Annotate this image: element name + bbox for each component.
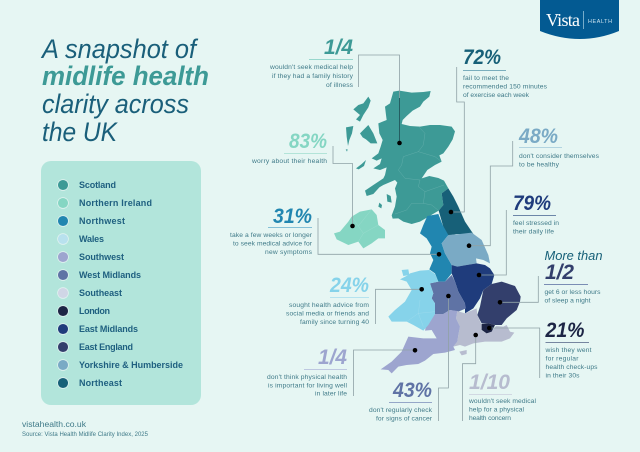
stat: 48% healthy bbox=[467, 125, 600, 248]
stat: 48% healthy: 48% bbox=[518, 125, 558, 148]
panel: legend: Northern Ireland bbox=[79, 198, 152, 208]
stat: 24% advice: sought health advice from bbox=[289, 302, 369, 309]
stat: 1/4 family history: 1/4 bbox=[324, 36, 353, 59]
stat: 24% advice: family since turning 40 bbox=[300, 319, 369, 326]
stat: 1/4 family history: wouldn't seek medical help bbox=[269, 64, 353, 71]
stat: 1/4 physical health bbox=[267, 346, 417, 398]
panel: legend: West Midlands bbox=[79, 270, 141, 280]
region: Northeast bbox=[439, 188, 473, 236]
stat: 1/10 physical concern: wouldn't seek medical bbox=[468, 398, 536, 405]
title: midlife health bbox=[42, 61, 209, 91]
footer: website and source: Source: Vista Health Midlife Clarity Index, 2025 bbox=[22, 432, 149, 438]
stat: more than 1/2 sleep: of sleep a night bbox=[544, 298, 591, 304]
stat: 24% advice bbox=[286, 274, 424, 326]
stat: 72% exercise: recommended 150 minutes bbox=[463, 84, 548, 90]
stat: 48% healthy: to be healthy bbox=[519, 162, 560, 168]
stat: 21% check-ups: for regular bbox=[546, 356, 579, 362]
stat: 72% exercise: of exercise each week bbox=[463, 92, 530, 99]
stat: 72% exercise bbox=[449, 46, 548, 214]
stat: 21% check-ups: 21% bbox=[545, 319, 585, 342]
region: Scotland bbox=[346, 91, 455, 224]
logo: Vista Health: HEALTH bbox=[588, 19, 612, 25]
panel: legend: Scotland bbox=[79, 180, 116, 190]
panel: legend: East Midlands bbox=[79, 324, 138, 334]
stat: 48% healthy: don't consider themselves bbox=[519, 153, 600, 160]
map of the UK bbox=[334, 91, 521, 373]
panel: legend: Southwest bbox=[79, 252, 124, 262]
stat: 21% check-ups: health check-ups bbox=[546, 364, 598, 371]
stat: 21% check-ups bbox=[487, 319, 598, 380]
stat: 43% cancer: 43% bbox=[392, 379, 432, 402]
region: Wales bbox=[388, 269, 438, 331]
panel: legend: Northwest bbox=[79, 216, 125, 226]
stat: 79% stressed: feel stressed in bbox=[513, 220, 559, 227]
stat: 31% delay bbox=[230, 205, 441, 257]
stat: 43% cancer: don't regularly check bbox=[369, 407, 433, 414]
title: A snapshot of bbox=[40, 34, 199, 64]
logo: Vista Health bbox=[540, 0, 619, 39]
stat: 21% check-ups: wish they went bbox=[544, 347, 592, 354]
title: clarity across bbox=[42, 89, 189, 119]
stat: 31% delay: to seek medical advice for bbox=[233, 240, 313, 248]
region: Southeast bbox=[453, 308, 514, 355]
panel: legend: East England bbox=[79, 342, 133, 352]
stat: 79% stressed: their daily life bbox=[513, 228, 554, 236]
stat: 1/4 physical health: in later life bbox=[315, 390, 347, 398]
stat: 31% delay: take a few weeks or longer bbox=[230, 232, 313, 239]
footer: website and source bbox=[22, 419, 149, 438]
England, Wales regions bbox=[381, 214, 521, 373]
stat: 1/4 family history: if they had a family history bbox=[272, 73, 354, 80]
region: East England bbox=[477, 282, 521, 325]
title: the UK bbox=[42, 117, 118, 147]
stat: 1/4 physical health: 1/4 bbox=[318, 346, 347, 369]
stat: 1/10 physical concern bbox=[462, 333, 536, 422]
stat: 79% stressed bbox=[477, 192, 559, 277]
stat: 43% cancer: for signs of cancer bbox=[376, 416, 433, 422]
stat: 1/4 physical health: is important for living well bbox=[268, 382, 348, 389]
stat: 31% delay: 31% bbox=[273, 205, 312, 228]
stat: 79% stressed: 79% bbox=[513, 192, 551, 215]
panel: legend bbox=[41, 161, 201, 405]
region: Northwest bbox=[420, 214, 452, 282]
stat: 1/4 physical health: don't think physical health bbox=[267, 374, 347, 381]
footer: website and source: vistahealth.co.uk bbox=[22, 419, 87, 429]
region: Yorkshire and Humberside bbox=[442, 233, 490, 267]
stat: 83% worry bbox=[251, 130, 355, 228]
panel: legend: Southeast bbox=[79, 288, 122, 298]
panel: legend: London bbox=[79, 306, 110, 316]
title bbox=[40, 34, 209, 147]
stat: 1/10 physical concern: help for a physical bbox=[469, 406, 524, 414]
stat: 24% advice: social media or friends and bbox=[286, 310, 369, 318]
stat: 83% worry: worry about their health bbox=[251, 158, 327, 165]
stat: 83% worry: 83% bbox=[289, 130, 327, 153]
stat: 72% exercise: 72% bbox=[463, 46, 501, 69]
stat: more than 1/2 sleep: More than bbox=[544, 249, 603, 263]
logo: Vista Health: Vista bbox=[546, 10, 580, 30]
stat: more than 1/2 sleep: get 6 or less hours bbox=[544, 289, 601, 296]
stat: 1/10 physical concern: 1/10 bbox=[469, 371, 510, 394]
panel: legend: Wales bbox=[79, 234, 104, 244]
region: Southwest bbox=[381, 310, 460, 373]
stat: 1/4 family history: of illness bbox=[326, 82, 354, 89]
stat: 1/4 family history bbox=[269, 36, 402, 145]
stat: 24% advice: 24% bbox=[329, 274, 369, 297]
panel: legend: Yorkshire & Humberside bbox=[79, 360, 183, 370]
panel: legend: Northeast bbox=[79, 378, 122, 388]
region: West Midlands bbox=[430, 275, 466, 314]
stat: 72% exercise: fail to meet the bbox=[463, 75, 509, 82]
stat: 1/10 physical concern: health concern bbox=[469, 415, 511, 422]
stat: more than 1/2 sleep: 1/2 bbox=[545, 261, 574, 284]
stat: 21% check-ups: in their 30s bbox=[546, 372, 580, 380]
stat: 31% delay: new symptoms bbox=[265, 249, 313, 256]
stat: 43% cancer bbox=[369, 294, 451, 422]
region: London bbox=[482, 323, 495, 333]
region: Northern Ireland bbox=[334, 209, 385, 248]
region: East Midlands bbox=[452, 263, 494, 313]
stat: more than 1/2 sleep bbox=[498, 249, 603, 305]
